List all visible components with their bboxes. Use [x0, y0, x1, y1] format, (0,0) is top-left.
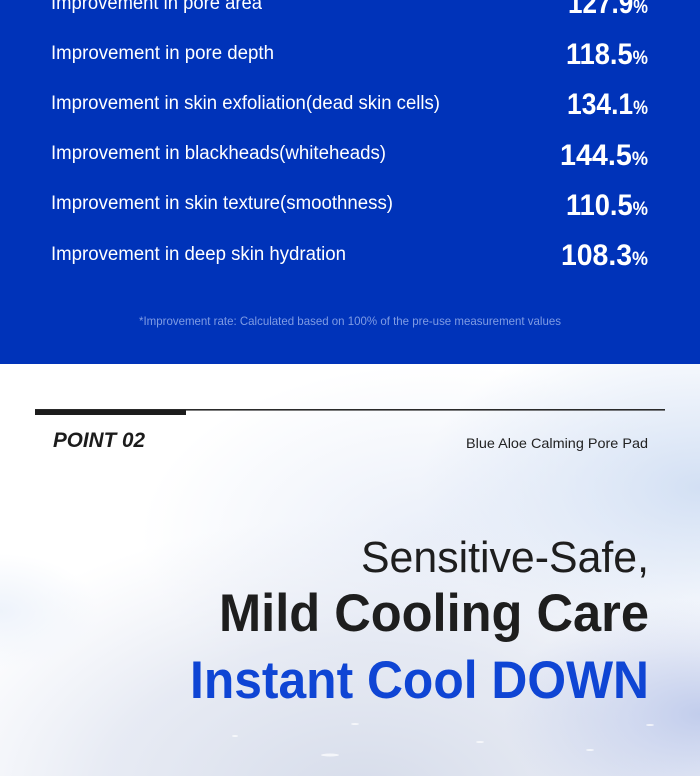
row: skin texture: 110.5%: [566, 189, 648, 222]
row: pore depth: [51, 38, 648, 71]
row: skin exfoliation: [51, 88, 648, 121]
headline: Sensitive-Safe,: [361, 533, 649, 582]
row: blackheads: Improvement in blackheads(whiteheads): [51, 143, 386, 164]
label: POINT 02: POINT 02: [53, 429, 145, 452]
row: skin exfoliation: Improvement in skin exfoliation(dead skin cells): [51, 93, 440, 114]
headline: Mild Cooling Care: [219, 584, 649, 643]
headline: Instant Cool DOWN: [190, 651, 649, 710]
row: blackheads: 144.5%: [560, 139, 648, 172]
row: skin exfoliation: 134.1%: [567, 88, 648, 121]
row: deep skin hydration: 108.3%: [561, 239, 648, 272]
headline: [190, 533, 649, 710]
row: pore depth: 118.5%: [566, 38, 648, 71]
row: blackheads: [51, 139, 648, 172]
row: pore area: [51, 0, 648, 20]
row: deep skin hydration: [51, 239, 648, 272]
row: skin texture: Improvement in skin texture(smoothness): [51, 193, 393, 214]
header rule: [35, 409, 665, 415]
row: deep skin hydration: Improvement in deep skin hydration: [51, 244, 346, 265]
row: pore depth: Improvement in pore depth: [51, 43, 274, 64]
footnote: *Improvement rate: Calculated based on 100% of the pre-use measurement values: [139, 314, 561, 328]
label: product name: Blue Aloe Calming Pore Pad: [466, 435, 648, 451]
panel: improvement results: [0, 0, 700, 364]
panel: icy background: [0, 364, 700, 776]
row: skin texture: [51, 189, 648, 222]
